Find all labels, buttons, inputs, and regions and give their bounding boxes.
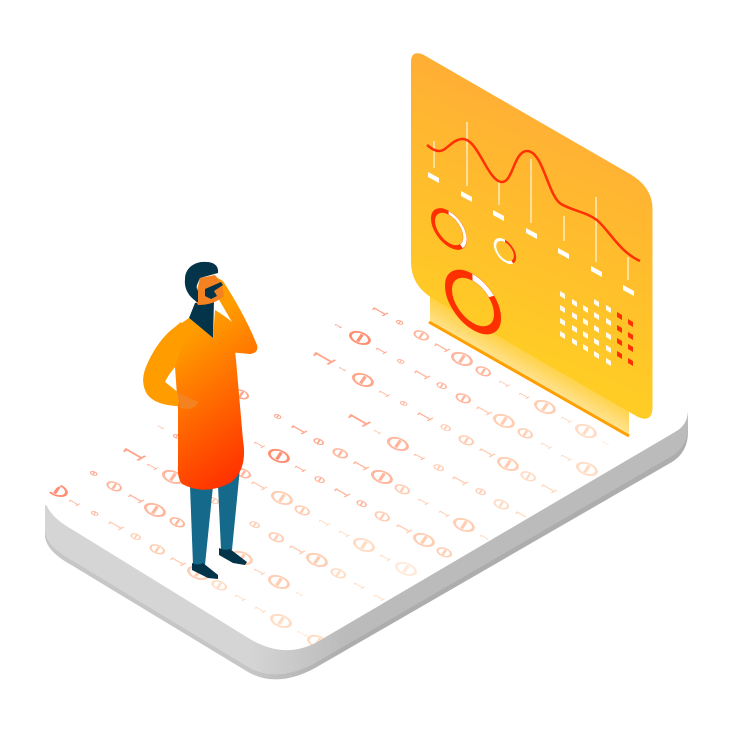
binary digits on floor: 1	[372, 550, 396, 564]
binary digits on floor: 1	[335, 365, 349, 373]
binary digits on floor: ⊘	[513, 467, 543, 485]
binary digits on floor: 1	[371, 386, 395, 400]
binary digits on floor: 1	[139, 459, 163, 473]
binary digits on floor: ⊘	[126, 531, 146, 543]
binary digits on floor: ⊘	[484, 409, 524, 433]
dashboard panel	[411, 53, 652, 419]
binary digits on floor: 1	[331, 322, 345, 330]
binary digits on floor: 1	[368, 343, 392, 357]
binary digits on floor: 1	[299, 344, 345, 370]
binary digits on floor: ⊘	[153, 465, 193, 489]
vertical chart bars	[434, 122, 628, 280]
binary digits on floor: ⊘	[261, 609, 301, 633]
binary digits on floor: ⊘	[525, 395, 565, 419]
binary digits on floor: 1	[506, 506, 538, 524]
binary digits on floor: 1	[119, 489, 151, 507]
legs	[190, 468, 240, 565]
binary digits on floor: 1	[227, 590, 251, 604]
binary digits on floor: 1	[280, 540, 312, 558]
binary digits on floor: 1	[406, 449, 430, 463]
binary digits on floor: ⊘	[486, 495, 516, 513]
face	[195, 275, 224, 305]
shoes	[192, 548, 247, 579]
binary digits on floor: ⊘	[471, 486, 491, 498]
binary digits on floor: ⊘	[344, 533, 384, 557]
binary digits on floor: 1	[325, 483, 357, 501]
binary digits on floor: 1	[410, 494, 434, 508]
binary digits on floor: ⊘	[378, 432, 418, 456]
binary digits on floor: ⊘	[309, 436, 329, 448]
binary digits on floor: ⊘	[393, 319, 407, 327]
binary digits on floor: 1	[425, 338, 457, 356]
donut large	[448, 263, 498, 341]
binary digits on floor: 1	[153, 423, 167, 431]
binary digits on floor: 1	[370, 428, 384, 436]
binary digits on floor: 1	[553, 412, 577, 426]
binary digits on floor: ⊘	[432, 380, 452, 392]
binary digits on floor: ⊘	[436, 422, 456, 434]
binary digits on floor: ⊘	[178, 561, 218, 585]
binary digits on floor: ⊘	[228, 464, 258, 482]
binary digits on floor: ⊘	[287, 501, 317, 519]
binary digits on floor: 1	[491, 376, 515, 390]
binary digits on floor: 1	[472, 530, 496, 544]
binary digits on floor: ⊘	[488, 452, 528, 476]
binary digits on floor: 1	[292, 590, 306, 598]
binary digits on floor: ⊘	[88, 510, 102, 518]
binary digits on floor: ⊘	[448, 389, 478, 407]
binary digits on floor: ⊘	[340, 326, 380, 350]
binary digits on floor: 1	[289, 626, 313, 640]
binary digits on floor: 1	[363, 302, 395, 320]
binary digits on floor: ⊘	[567, 457, 607, 481]
binary digits on floor: ⊘	[162, 513, 192, 531]
binary digits on floor: 1	[532, 479, 564, 497]
binary digits on floor: 1	[282, 420, 314, 438]
binary digits on floor: ⊘	[566, 419, 606, 443]
binary digits on floor: 1	[344, 456, 376, 474]
binary digits on floor: ⊘	[259, 570, 299, 594]
binary digits on floor: 1	[109, 440, 155, 466]
binary digits on floor: 1	[346, 578, 370, 592]
platform base	[45, 270, 688, 679]
binary digits on floor: 1	[533, 438, 557, 452]
binary digits on floor: 1	[246, 564, 270, 578]
binary digits on floor: ⊘	[510, 424, 540, 442]
binary digits on floor: 1	[311, 515, 335, 529]
donut small middle	[495, 235, 515, 267]
binary digits on floor: ⊘	[245, 519, 265, 531]
binary digits on floor: ⊘	[387, 480, 417, 498]
binary digits on floor: 1	[242, 476, 274, 494]
binary digits on floor: ⊘	[135, 498, 175, 522]
hair	[185, 262, 218, 302]
binary digits on floor: ⊘	[170, 433, 184, 441]
binary digits on floor: ⊘	[37, 478, 77, 502]
binary digits on floor: ⊘	[259, 444, 299, 468]
binary digits on floor: ⊘	[271, 413, 285, 421]
binary digits on floor: 1	[553, 450, 577, 464]
reflection under panel	[429, 290, 629, 436]
binary digits on floor: 1	[366, 590, 390, 604]
binary digits on floor	[37, 302, 612, 654]
binary digits on floor: ⊘	[298, 630, 338, 654]
donut small left	[433, 204, 465, 254]
hip hand	[177, 392, 198, 409]
binary digits on floor: ⊘	[404, 528, 444, 552]
binary digits on floor: ⊘	[397, 400, 411, 408]
binary digits on floor: ⊘	[386, 557, 426, 581]
binary digits on floor: 1	[161, 552, 193, 570]
binary digits on floor: 1	[467, 401, 499, 419]
binary digits on floor: ⊘	[297, 548, 337, 572]
binary digits on floor: 1	[511, 388, 535, 402]
binary digits on floor: ⊘	[451, 431, 481, 449]
binary digits on floor: 1	[331, 526, 355, 540]
binary digits on floor: 1	[443, 471, 475, 489]
binary digits on floor: 1	[387, 519, 419, 537]
binary digits on floor: 1	[287, 461, 311, 475]
sleeve left	[143, 322, 183, 406]
binary digits on floor: ⊘	[87, 470, 101, 478]
raised arm	[216, 277, 257, 354]
binary digits on floor: ⊘	[442, 347, 482, 371]
binary digits on floor: ⊘	[262, 486, 302, 510]
binary digits on floor: 1	[61, 495, 85, 509]
binary digits on floor: ⊘	[468, 362, 498, 380]
binary digits on floor: ⊘	[310, 474, 330, 486]
binary digits on floor: ⊘	[367, 507, 397, 525]
binary digits on floor: 1	[246, 437, 270, 451]
person	[143, 262, 257, 579]
binary digits on floor: ⊘	[429, 462, 449, 474]
binary digits on floor: ⊘	[352, 498, 372, 510]
binary digits on floor: 1	[598, 439, 612, 447]
binary digits on floor: ⊘	[323, 564, 353, 582]
dot grid	[560, 291, 611, 366]
binary digits on floor: ⊘	[99, 477, 129, 495]
binary digits on floor: ⊘	[222, 546, 262, 570]
binary digits on floor: ⊘	[226, 385, 256, 403]
binary digits on floor: ⊘	[444, 513, 484, 537]
neck	[189, 300, 214, 338]
binary digits on floor: ⊘	[325, 444, 355, 462]
binary digits on floor: ⊘	[406, 326, 436, 344]
binary digits on floor: ⊘	[362, 465, 402, 489]
binary digits on floor: ⊘	[343, 368, 383, 392]
binary digits on floor: ⊘	[204, 576, 234, 594]
binary digits on floor: ⊘	[142, 540, 172, 558]
coat	[143, 310, 244, 490]
binary digits on floor: ⊘	[204, 495, 224, 507]
binary digits on floor: 1	[99, 516, 131, 534]
beard and glasses	[205, 282, 223, 299]
binary digits on floor: ⊘	[429, 543, 459, 561]
binary digits on floor: 1	[408, 407, 440, 425]
binary digits on floor: ⊘	[261, 528, 291, 546]
binary digits on floor: 1	[470, 443, 502, 461]
binary digits on floor: 1	[247, 602, 271, 616]
red dot grid	[617, 312, 633, 366]
binary digits on floor: ⊘	[394, 358, 408, 366]
line chart	[427, 139, 640, 261]
binary digits on floor: 1	[431, 506, 455, 520]
binary digits on floor: 1	[405, 365, 437, 383]
binary digits on floor: 1	[334, 406, 380, 432]
axis tick marks	[428, 172, 634, 296]
